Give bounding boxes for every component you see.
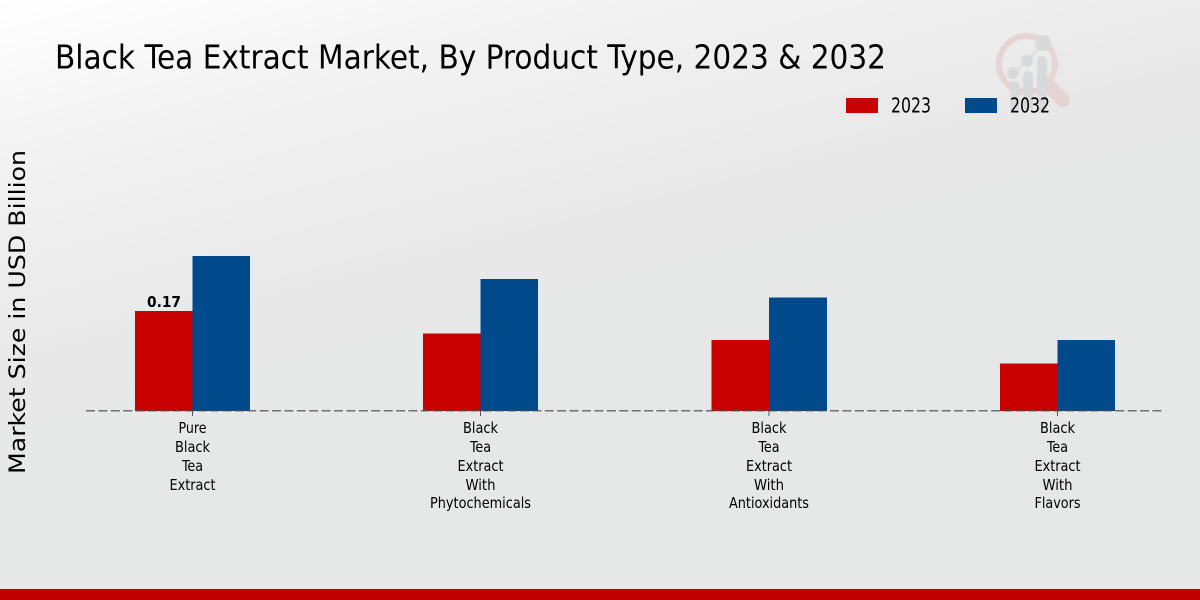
- category label: Black Tea Extract With Antioxidants: Black: [752, 419, 787, 437]
- category label: Black Tea Extract With Antioxidants: [729, 419, 809, 512]
- bars: Pure Black Tea Extract: [135, 256, 250, 411]
- category label: Black Tea Extract With Antioxidants: With: [754, 476, 784, 494]
- legend label: 2032: 2032: [1010, 94, 1050, 118]
- legend label: 2023: 2023: [891, 94, 931, 118]
- category label: Black Tea Extract With Antioxidants: Tea: [758, 438, 780, 456]
- category label: Black Tea Extract With Phytochemicals: Extract: [458, 457, 504, 475]
- legend swatch: 2032: [965, 98, 997, 113]
- category label: Black Tea Extract With Phytochemicals: Tea: [469, 438, 491, 456]
- category label: Pure Black Tea Extract: Tea: [181, 457, 203, 475]
- watermark logo: [999, 35, 1063, 111]
- legend swatch: 2023: [846, 98, 878, 113]
- bars: Black Tea Extract With Antioxidants: [712, 298, 827, 411]
- category label: Black Tea Extract With Flavors: With: [1042, 476, 1072, 494]
- category label: Black Tea Extract With Phytochemicals: [430, 419, 531, 512]
- category label: Black Tea Extract With Antioxidants: Extract: [746, 457, 792, 475]
- category label: Black Tea Extract With Phytochemicals: Phytochemicals: [430, 494, 531, 512]
- bars: Black Tea Extract With Phytochemicals: [423, 279, 538, 411]
- category label: Pure Black Tea Extract: Extract: [170, 476, 216, 494]
- category label: Black Tea Extract With Antioxidants: Antioxidants: [729, 494, 809, 512]
- y axis label: Market Size in USD Billion: [5, 150, 31, 474]
- bar chart: [86, 256, 1164, 416]
- category label: Black Tea Extract With Flavors: Black: [1040, 419, 1076, 437]
- x axis ticks: [192, 411, 1058, 416]
- category label: Black Tea Extract With Phytochemicals: With: [466, 476, 496, 494]
- category label: Pure Black Tea Extract: Black: [175, 438, 211, 456]
- category label: Pure Black Tea Extract: [170, 419, 216, 494]
- category label: Black Tea Extract With Phytochemicals: Black: [463, 419, 499, 437]
- title: Black Tea Extract Market, By Product Type, 2023 & 2032: [55, 38, 886, 76]
- category label: Black Tea Extract With Flavors: Extract: [1034, 457, 1081, 475]
- data label: 0.17: 0.17: [147, 293, 181, 311]
- legend: [846, 94, 1050, 118]
- category label: Black Tea Extract With Flavors: Flavors: [1034, 494, 1080, 512]
- category label: Pure Black Tea Extract: Pure: [178, 419, 206, 437]
- footer bar: [0, 589, 1200, 600]
- category label: Black Tea Extract With Flavors: [1034, 419, 1081, 512]
- category label: Black Tea Extract With Flavors: Tea: [1046, 438, 1068, 456]
- x axis baseline: [86, 410, 1164, 412]
- bars: Black Tea Extract With Flavors: [1000, 340, 1115, 411]
